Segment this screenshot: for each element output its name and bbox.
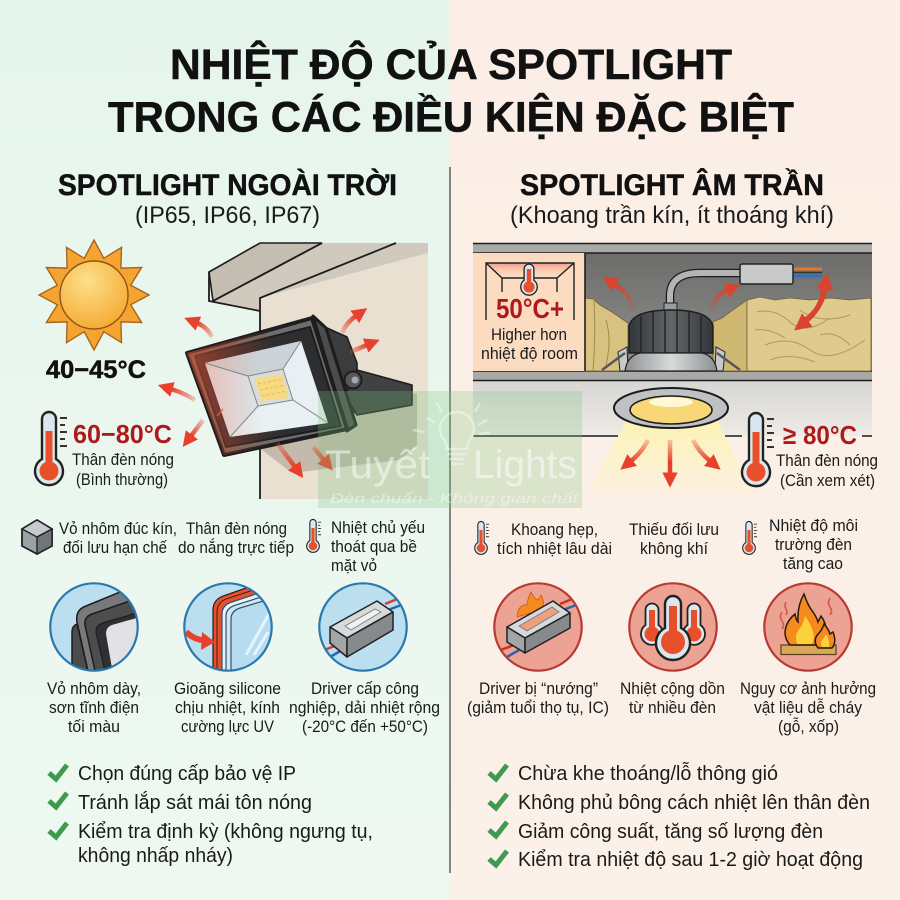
background left: [0, 0, 450, 900]
ceiling cavity illustration: [473, 244, 872, 436]
light cone: [583, 420, 757, 500]
text: ambient rises: tăng cao: [783, 554, 843, 573]
checklist: outdoor: không nhấp nháy): [78, 845, 233, 867]
text: no convection: [629, 520, 719, 558]
text: no convection: Thiếu đối lưu: [629, 520, 719, 539]
body temperature recessed: ≥ 80°C: [783, 420, 857, 450]
body temperature outdoor: (Bình thường): [76, 470, 168, 489]
body temperature recessed: (Cần xem xét): [780, 471, 875, 490]
text: no convection: không khí: [640, 539, 708, 558]
icon circle: housing: [49, 582, 139, 672]
caption: baked driver: [467, 679, 609, 717]
text: narrow cavity: Khoang hẹp,: [511, 520, 598, 539]
wall and roof illustration: [209, 243, 428, 499]
caption: driver: [289, 679, 440, 736]
caption: flammable: (gỗ, xốp): [778, 717, 839, 736]
checklist: recessed: Không phủ bông cách nhiệt lên thân đèn: [518, 792, 870, 814]
room temperature callout: nhiệt độ room: [481, 344, 578, 363]
downlight: [614, 388, 728, 428]
heat arrows: cavity: [614, 284, 825, 321]
body temperature outdoor: 60−80°C: [73, 419, 172, 449]
caption: stacked heat: từ nhiều đèn: [629, 698, 716, 717]
caption: gasket: [174, 679, 281, 736]
icon circle: silicone gasket: [183, 582, 273, 672]
icon: thermometer narrow cavity: [475, 521, 489, 554]
body temperature recessed: [776, 420, 878, 490]
body temperature outdoor: [72, 419, 174, 489]
caption: gasket: Gioăng silicone: [174, 679, 281, 698]
caption: driver: Driver cấp công: [311, 679, 419, 698]
caption: housing: tối màu: [68, 717, 120, 736]
watermark: Tuyết: [325, 443, 430, 487]
sun temperature: 40−45°C: [46, 356, 146, 384]
title: TRONG CÁC ĐIỀU KIỆN ĐẶC BIỆT: [108, 92, 794, 142]
heading: recessed: (Khoang trần kín, ít thoáng khí): [510, 202, 834, 229]
caption: flammable: [740, 679, 876, 736]
icon circle: driver: [319, 583, 407, 671]
caption: baked driver: Driver bị “nướng”: [479, 679, 598, 698]
text: ambient rises: [769, 516, 858, 573]
checklist: recessed: Chừa khe thoáng/lỗ thông gió: [518, 762, 778, 785]
title: [108, 40, 794, 142]
heading: outdoor: (IP65, IP66, IP67): [135, 202, 320, 229]
text: narrow cavity: [497, 520, 612, 558]
caption: gasket: cường lực UV: [181, 717, 275, 736]
text: ambient rises: Nhiệt độ môi: [769, 516, 858, 535]
body temperature outdoor: Thân đèn nóng: [72, 450, 174, 469]
text: direct sun: do nắng trực tiếp: [178, 538, 294, 557]
checklist: recessed: [489, 762, 870, 871]
body temperature recessed: Thân đèn nóng: [776, 451, 878, 470]
caption: flammable: vật liệu dễ cháy: [754, 698, 862, 717]
text: direct sun: Thân đèn nóng: [186, 519, 287, 538]
watermark: Đèn chuẩn - Không gian chất: [330, 490, 580, 506]
room temperature callout: Higher hơn: [491, 325, 567, 344]
driver box: [740, 264, 822, 284]
text: ambient rises: trường đèn: [775, 535, 852, 554]
caption: driver: nghiệp, dải nhiệt rộng: [289, 698, 440, 717]
caption: flammable: Nguy cơ ảnh hưởng: [740, 679, 876, 698]
text: surface heat: Nhiệt chủ yếu: [331, 518, 425, 537]
text: surface heat: thoát qua bề: [331, 537, 417, 556]
checklist: outdoor: [49, 763, 373, 867]
caption: housing: [47, 679, 141, 736]
panel: recessed spotlight: [467, 168, 878, 871]
room temperature callout: 50°C+: [496, 293, 564, 324]
caption: driver: (-20°C đến +50°C): [302, 717, 428, 736]
caption: housing: sơn tĩnh điện: [49, 698, 139, 717]
text: cast aluminium: đối lưu hạn chế: [63, 538, 167, 557]
thermometer: body temperature recessed: [742, 413, 774, 486]
text: surface heat: [331, 518, 425, 575]
text: cast aluminium: [59, 519, 177, 557]
background right: [450, 0, 900, 900]
watermark: [318, 391, 582, 508]
caption: gasket: chịu nhiệt, kính: [175, 698, 280, 717]
checklist: outdoor: Kiểm tra định kỳ (không ngưng tụ,: [78, 821, 373, 843]
heading: recessed: [510, 168, 834, 229]
floodlight: [187, 316, 412, 455]
heat arrows: downlight: [631, 440, 710, 474]
icon circle: stacked heat: [629, 583, 717, 671]
text: surface heat: mặt vỏ: [331, 556, 377, 575]
thermometer: body temperature outdoor: [35, 412, 67, 485]
text: narrow cavity: tích nhiệt lâu dài: [497, 539, 612, 558]
text: direct sun: [178, 519, 294, 557]
checklist: recessed: Giảm công suất, tăng số lượng đèn: [518, 821, 823, 843]
watermark: Lights: [473, 443, 577, 487]
caption: stacked heat: [620, 679, 725, 717]
room temperature callout: [473, 253, 585, 371]
title: NHIỆT ĐỘ CỦA SPOTLIGHT: [170, 40, 732, 89]
heat arrows: floodlight: [171, 316, 367, 467]
caption: stacked heat: Nhiệt cộng dồn: [620, 679, 725, 698]
icon circle: flammable: [764, 583, 852, 671]
checklist: outdoor: Tránh lắp sát mái tôn nóng: [78, 791, 312, 814]
icon: small thermometer: [307, 519, 321, 552]
checklist: recessed: Kiểm tra nhiệt độ sau 1-2 giờ hoạt động: [518, 849, 863, 871]
heading: outdoor: [58, 168, 397, 229]
icon: thermometer ambient: [743, 521, 757, 554]
icon: sun: [39, 240, 149, 350]
caption: baked driver: (giảm tuổi thọ tụ, IC): [467, 698, 609, 717]
heading: outdoor: SPOTLIGHT NGOÀI TRỜI: [58, 168, 397, 202]
heading: recessed: SPOTLIGHT ÂM TRẦN: [520, 168, 824, 202]
checklist: outdoor: Chọn đúng cấp bảo vệ IP: [78, 763, 296, 785]
text: cast aluminium: Vỏ nhôm đúc kín,: [59, 519, 177, 538]
panel: outdoor spotlight: [22, 168, 440, 867]
icon circle: baked driver: [494, 583, 582, 671]
recessed fixture: [602, 264, 822, 371]
caption: housing: Vỏ nhôm dày,: [47, 679, 141, 698]
icon: aluminium cube: [22, 520, 52, 554]
